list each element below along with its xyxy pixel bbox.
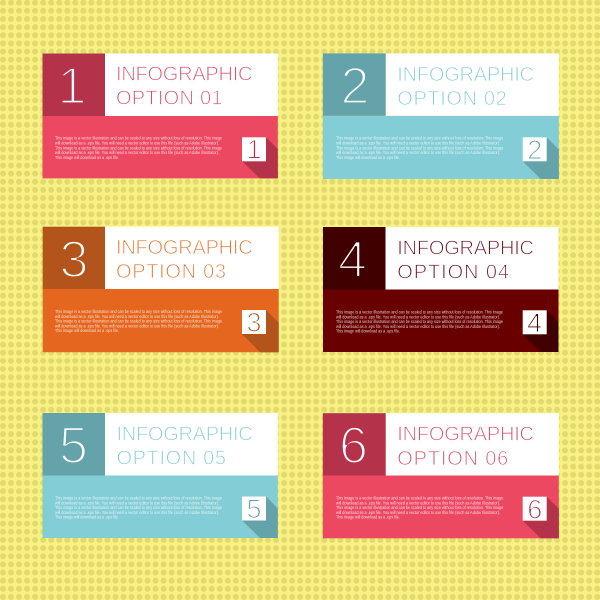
heading 5: OPTION 05 bbox=[116, 447, 226, 469]
body text 3: This image is a vector illustration and can be scaled to any size without loss of resolution. This image bbox=[55, 319, 222, 324]
body text 2: will download as a .eps file. You will need a vector editor to use this file (such as Adobe Illustrator). bbox=[336, 150, 500, 155]
body text 6: This image will download as a .eps file. bbox=[336, 515, 400, 520]
shadow 1 bbox=[242, 137, 278, 178]
body text 3: will download as a .eps file. You will need a vector editor to use this file (such as Adobe Illustrator). bbox=[55, 314, 219, 319]
body text 6: will download as a .eps file. You will need a vector editor to use this file (such as Adobe Illustrator). bbox=[336, 500, 500, 505]
heading 3: INFOGRAPHIC bbox=[116, 237, 253, 259]
body text 2: This image is a vector illustration and can be scaled to any size without loss of resolution. This image bbox=[336, 145, 504, 150]
body text 3: This image will download as a .eps file. bbox=[55, 328, 119, 333]
body text 6: This image is a vector illustration and can be scaled to any size without loss of resolution. This image bbox=[336, 496, 504, 500]
body text 3: will download as a .eps file. You will need a vector editor to use this file (such as Adobe Illustrator). bbox=[55, 323, 219, 328]
body text 5: will download as a .eps file. You will need a vector editor to use this file (such as Adobe Illustrator). bbox=[55, 500, 219, 505]
heading 5: INFOGRAPHIC bbox=[116, 424, 253, 446]
heading 6: OPTION 06 bbox=[397, 448, 508, 470]
number tile 1: 1 bbox=[58, 58, 86, 116]
heading 6: INFOGRAPHIC bbox=[397, 424, 534, 446]
body text 3: This image is a vector illustration and can be scaled to any size without loss of resolution. This image bbox=[55, 309, 222, 314]
body text 5: This image will download as a .eps file. bbox=[55, 515, 119, 520]
shadow 6 bbox=[523, 497, 559, 538]
panel: option 4 bbox=[323, 227, 558, 352]
body text 6: This image is a vector illustration and can be scaled to any size without loss of resolution. This image bbox=[336, 505, 504, 510]
badge 6 bbox=[523, 494, 547, 524]
heading 2: OPTION 02 bbox=[397, 88, 507, 110]
badge 2: 2 bbox=[527, 135, 542, 165]
body text 4: will download as a .eps file. You will need a vector editor to use this file (such as Adobe Illustrator). bbox=[336, 324, 500, 329]
body text 4: will download as a .eps file. You will need a vector editor to use this file (such as Adobe Illustrator). bbox=[336, 314, 500, 319]
panel: option 1 bbox=[42, 54, 278, 178]
number tile 6 bbox=[323, 413, 386, 476]
number tile 6: 6 bbox=[339, 417, 368, 475]
badge 5: 5 bbox=[246, 494, 262, 524]
badge 4 bbox=[523, 308, 547, 338]
badge 1: 1 bbox=[246, 135, 262, 165]
badge 6: 6 bbox=[527, 494, 542, 524]
number tile 4: 4 bbox=[338, 231, 367, 289]
number tile 3: 3 bbox=[60, 231, 88, 289]
shadow 2 bbox=[523, 137, 559, 179]
panel: option 2 bbox=[323, 53, 559, 179]
badge 1 bbox=[242, 135, 266, 165]
body text 2: This image will download as a .eps file. bbox=[336, 155, 400, 160]
number tile 2: 2 bbox=[341, 58, 369, 116]
badge 4: 4 bbox=[527, 308, 542, 338]
body text 1: This image will download as a .eps file. bbox=[55, 155, 119, 160]
body text 1: will download as a .eps file. You will need a vector editor to use this file (such as Adobe Illustrator). bbox=[55, 150, 219, 155]
number tile 1 bbox=[42, 54, 105, 116]
body text 2: This image is a vector illustration and can be scaled to any size without loss of resolution. This image bbox=[336, 136, 504, 141]
badge 5 bbox=[242, 494, 266, 524]
body text 4: This image is a vector illustration and can be scaled to any size without loss of resolution. This image bbox=[336, 310, 503, 314]
heading 3: OPTION 03 bbox=[116, 261, 226, 283]
shadow 4 bbox=[523, 310, 558, 352]
heading 1: OPTION 01 bbox=[116, 87, 222, 109]
panel: option 6 bbox=[323, 413, 559, 538]
body text 5: This image is a vector illustration and can be scaled to any size without loss of resolution. This image bbox=[55, 496, 222, 500]
number tile 4 bbox=[323, 227, 386, 290]
body text 2: will download as a .eps file. You will need a vector editor to use this file (such as Adobe Illustrator). bbox=[336, 140, 500, 146]
heading 4: INFOGRAPHIC bbox=[397, 237, 534, 259]
badge 3 bbox=[242, 308, 266, 338]
body text 4: This image will download as a .eps file. bbox=[336, 329, 400, 334]
body text 4: This image is a vector illustration and can be scaled to any size without loss of resolution. This image bbox=[336, 319, 503, 324]
badge 2 bbox=[523, 135, 547, 165]
shadow 5 bbox=[242, 496, 278, 538]
heading 1: INFOGRAPHIC bbox=[116, 64, 252, 86]
badge 3: 3 bbox=[246, 308, 262, 338]
body text 1: This image is a vector illustration and can be scaled to any size without loss of resolution. This image bbox=[55, 145, 222, 150]
heading 2: INFOGRAPHIC bbox=[397, 64, 534, 86]
body text 1: will download as a .eps file. You will need a vector editor to use this file (such as Adobe Illustrator). bbox=[55, 140, 219, 146]
body text 5: will download as a .eps file. You will need a vector editor to use this file (such as Adobe Illustrator). bbox=[55, 510, 219, 515]
panel: option 5 bbox=[42, 413, 278, 538]
body text 1: This image is a vector illustration and can be scaled to any size without loss of resolution. This image bbox=[55, 136, 222, 141]
number tile 5 bbox=[42, 413, 105, 476]
panel: option 3 bbox=[43, 227, 279, 352]
number tile 5: 5 bbox=[59, 417, 88, 475]
body text 6: will download as a .eps file. You will need a vector editor to use this file (such as Adobe Illustrator). bbox=[336, 510, 500, 515]
shadow 3 bbox=[242, 310, 279, 352]
body text 5: This image is a vector illustration and can be scaled to any size without loss of resolution. This image bbox=[55, 505, 222, 510]
number tile 2 bbox=[323, 53, 386, 116]
number tile 3 bbox=[43, 227, 105, 289]
heading 4: OPTION 04 bbox=[397, 261, 509, 283]
